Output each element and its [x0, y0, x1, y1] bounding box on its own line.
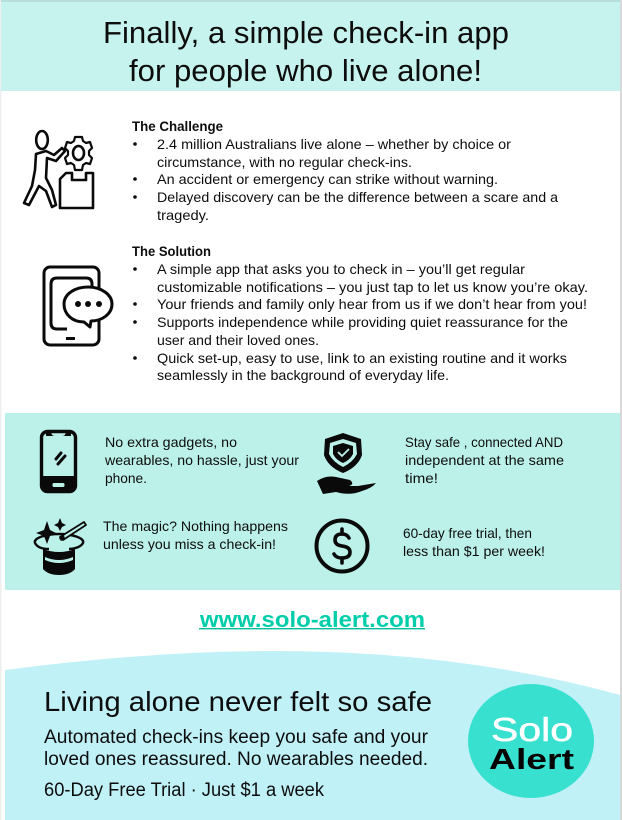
text: free trial: 60-day free trial, then [403, 526, 532, 541]
title [103, 16, 509, 88]
icon: magic hat and wand [35, 518, 86, 575]
text: free trial: less than $1 per week! [403, 544, 545, 559]
footer banner [5, 651, 620, 820]
panel: benefits [5, 413, 620, 590]
text block: the solution: customizable notifications – you just tap to let us know you’re okay. [157, 280, 588, 295]
text: no extra gadgets: wearables, no hassle, just your [104, 453, 299, 468]
header band [1, 0, 620, 91]
text block: the challenge: Delayed discovery can be the difference between a scare and a [157, 190, 558, 205]
icon: tablet with speech bubble [44, 267, 112, 345]
text: stay safe: Stay safe , connected AND [405, 435, 563, 450]
text: stay safe [405, 435, 564, 486]
footer description: loved ones reassured. No wearables needed. [44, 749, 428, 770]
logo [468, 684, 594, 798]
icon: dollar coin [316, 520, 368, 572]
text block: the solution: A simple app that asks you to check in – you’ll get regular [157, 262, 525, 277]
text: the magic [103, 519, 288, 552]
text block: the solution: seamlessly in the background of everyday life. [157, 368, 449, 383]
text block: the solution: Your friends and family only hear from us if we don’t hear from you! [157, 297, 587, 312]
text block: the challenge [132, 119, 558, 223]
text: free trial [403, 526, 545, 559]
icon: person with gear and box [24, 131, 93, 208]
text block: the challenge: An accident or emergency can strike without warning. [157, 172, 498, 187]
title: for people who live alone! [129, 54, 482, 88]
text block: the solution: user and their loved ones. [157, 333, 319, 348]
text: no extra gadgets: No extra gadgets, no [105, 435, 237, 450]
text block: the challenge: tragedy. [157, 208, 209, 223]
footer offer: 60-Day Free Trial · Just $1 a week [44, 780, 324, 801]
text: stay safe: independent at the same [405, 453, 564, 468]
footer heading: Living alone never felt so safe [44, 686, 432, 717]
text block: the challenge: The Challenge [132, 119, 223, 134]
text block: the solution [132, 244, 588, 383]
text: the magic: unless you miss a check-in! [103, 537, 276, 552]
website link: www.solo-alert.com [199, 607, 425, 632]
text: no extra gadgets: phone. [105, 471, 147, 486]
icon: smartphone [41, 431, 76, 492]
text block: the solution: The Solution [132, 244, 211, 259]
text block: the solution: Quick set-up, easy to use, link to an existing routine and it works [157, 351, 567, 366]
icon: shield on hand [317, 433, 376, 494]
footer description [44, 727, 429, 770]
text block: the challenge: 2.4 million Australians live alone – whether by choice or [157, 137, 511, 152]
logo: Solo [491, 711, 573, 748]
footer description: Automated check-ins keep you safe and your [44, 727, 429, 748]
text: stay safe: time! [405, 471, 438, 486]
text: the magic: The magic? Nothing happens [103, 519, 288, 534]
text: no extra gadgets [104, 435, 299, 486]
text block: the challenge: circumstance, with no regular check-ins. [157, 155, 412, 170]
text block: the solution: Supports independence while providing quiet reassurance for the [157, 315, 568, 330]
logo: Alert [489, 744, 574, 776]
title: Finally, a simple check-in app [103, 16, 509, 50]
